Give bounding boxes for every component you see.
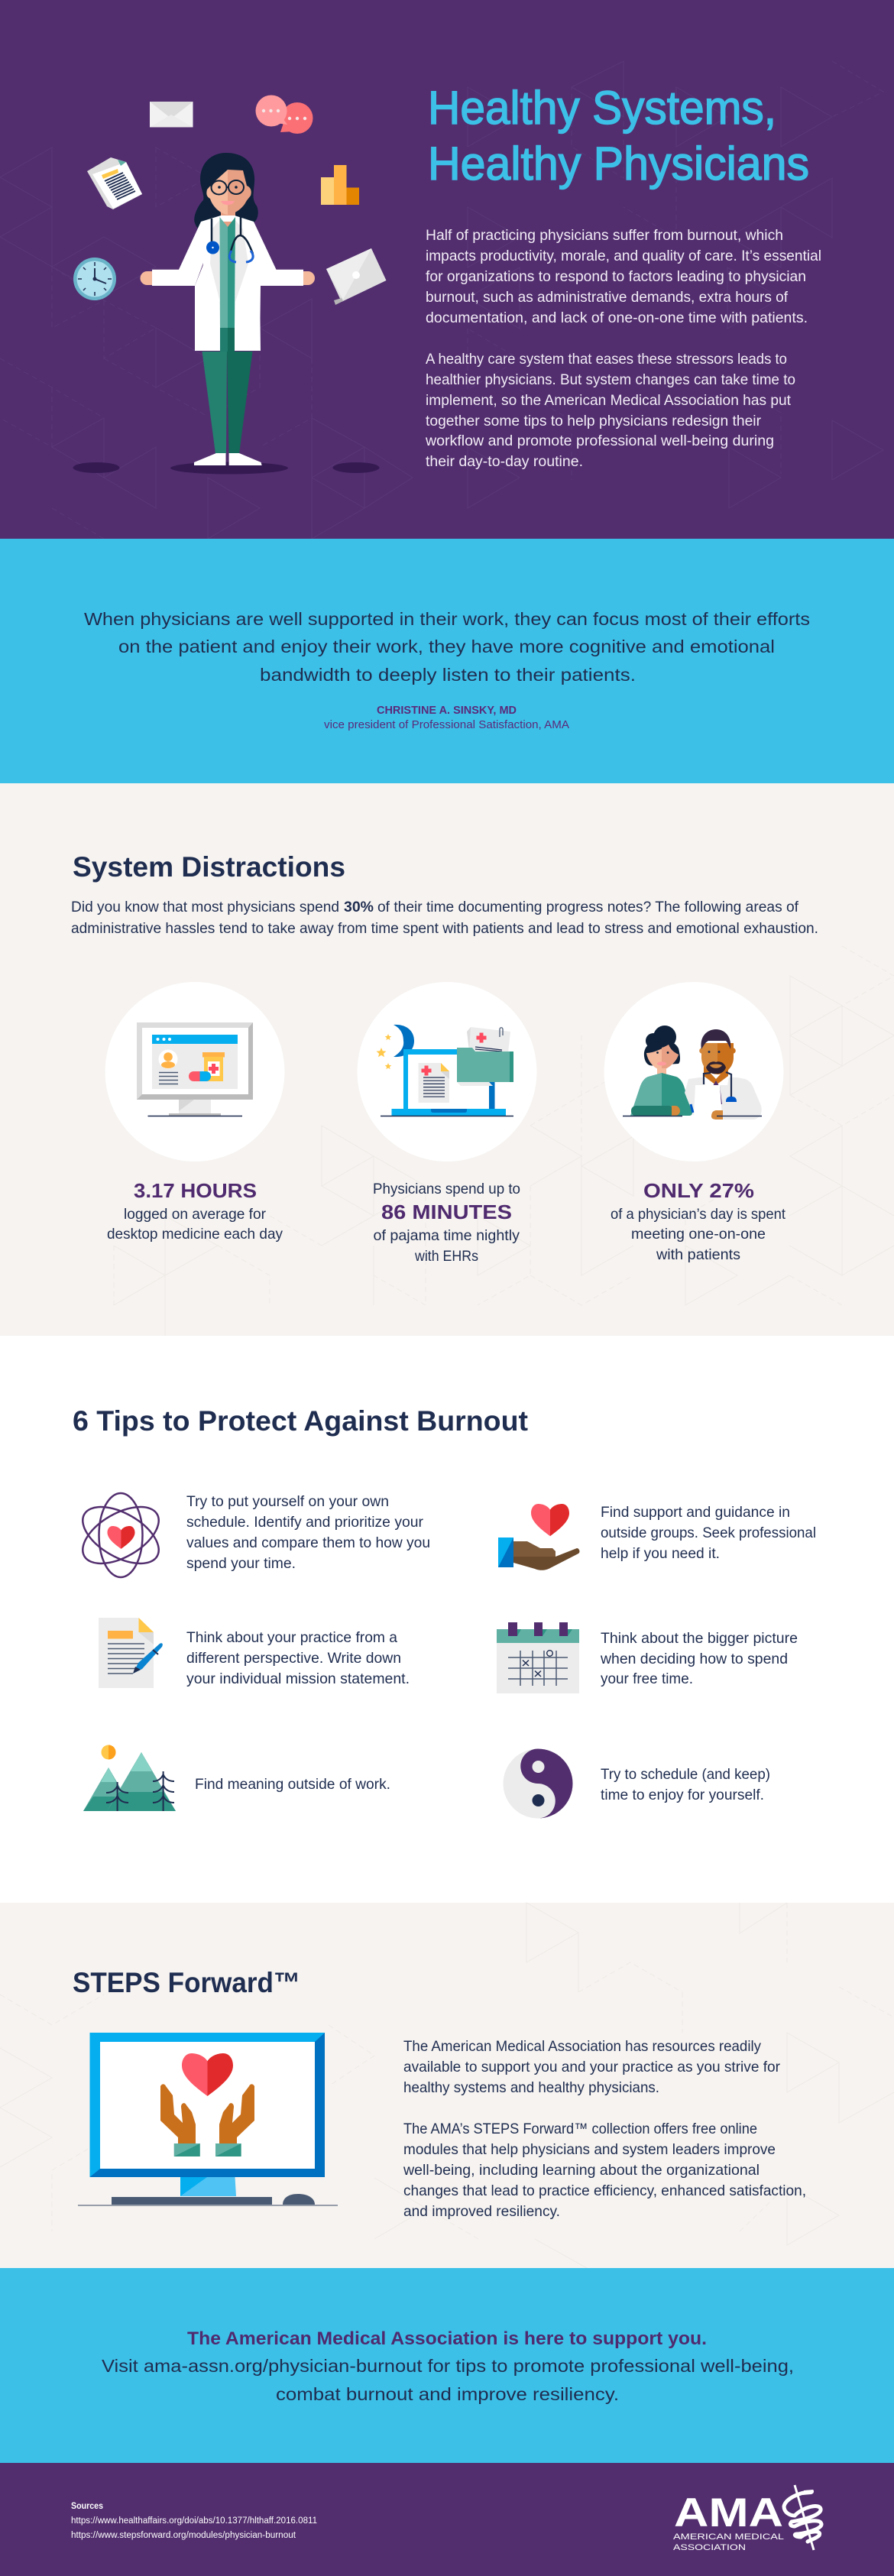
stethoscope	[212, 217, 253, 254]
body text: STEPS Forward collection	[403, 2121, 806, 2220]
icon: bar chart	[321, 165, 359, 205]
icon: hand with heart	[498, 1504, 579, 1570]
neck	[221, 208, 235, 228]
tip text: Find support and guidance in	[601, 1504, 790, 1521]
tip text: values and compare them to how you	[186, 1534, 430, 1551]
sources: https://www.healthaffairs.org/doi/abs/10.1377/hlthaff.2016.0811	[71, 2516, 317, 2526]
icon: stacked document	[87, 157, 142, 209]
body text: STEPS Forward collection: modules that help physicians and system leaders improve	[403, 2141, 776, 2158]
intro text: burnout: for organizations to respond to factors leading to physician	[426, 268, 806, 285]
tip text: spend your time.	[186, 1555, 296, 1572]
tip text: your free time.	[601, 1670, 693, 1687]
stat text: with patients	[656, 1246, 740, 1263]
call to action text: Visit ama-assn.org/physician-burnout for tips to promote professional well-being,	[102, 2356, 794, 2376]
intro text: healthy care system: A healthy care system that eases these stressors leads to	[426, 351, 787, 368]
heading: System Distractions: System Distractions	[73, 851, 345, 883]
stat text: with EHRs	[414, 1248, 478, 1265]
tip text: time to enjoy for yourself.	[601, 1787, 764, 1803]
glasses	[205, 180, 244, 194]
intro text: system distractions	[71, 899, 818, 937]
tip 5: bigger picture	[497, 1622, 798, 1693]
icon: desktop monitor	[137, 1022, 253, 1116]
intro text: system distractions: administrative hassles tend to take away from time spent with patients and lead to stress and emotional exhaustion.	[71, 921, 818, 937]
icon: mountains and trees	[83, 1745, 176, 1811]
tip text	[186, 1493, 430, 1572]
face	[206, 170, 228, 215]
body text: AMA resources	[403, 2038, 780, 2096]
section background: STEPS Forward	[0, 1903, 894, 2268]
call to action heading: The American Medical Association is here to support you.	[187, 2328, 707, 2349]
icon: calendar	[497, 1622, 579, 1693]
quote text: on the patient and enjoy their work, they have more cognitive and emotional	[118, 637, 775, 656]
intro text: system distractions: 30%	[344, 899, 374, 915]
hero illustration: doctor juggling tasks	[73, 95, 387, 474]
icon: laptop with folder at night	[376, 1025, 513, 1116]
tip text	[601, 1766, 770, 1803]
logo: American Medical Association: AMA	[674, 2490, 783, 2535]
stat text	[107, 1179, 283, 1243]
stat text: logged on average for	[124, 1206, 266, 1223]
tip 2: different perspective	[99, 1618, 410, 1688]
logo: American Medical Association: AMERICAN MEDICAL	[673, 2532, 784, 2542]
tip text: Think about the bigger picture	[601, 1630, 798, 1647]
quote text	[84, 609, 810, 685]
call to action text	[102, 2356, 794, 2404]
tip text	[600, 1630, 798, 1687]
sources	[71, 2502, 317, 2540]
title: Healthy Systems,	[428, 82, 776, 134]
lab coat	[152, 215, 303, 351]
intro text: healthy care system: healthier physicians. But system changes can take time to	[426, 371, 795, 388]
hands	[141, 271, 159, 285]
stat card: only 27%	[604, 982, 786, 1263]
tip 4: outside groups	[498, 1504, 816, 1570]
heading: STEPS Forward: STEPS Forward™	[73, 1967, 300, 1998]
scrub pants top	[220, 328, 228, 352]
icon: atom heart	[73, 1493, 168, 1577]
stat text: 3.17 HOURS	[134, 1179, 257, 1202]
patient	[630, 1026, 692, 1116]
icon: yin yang	[503, 1748, 573, 1819]
intro text: system distractions: of their time documenting progress notes? The following areas of	[377, 899, 799, 915]
tip 3: meaning outside of work	[83, 1745, 390, 1811]
panel: footer	[0, 2463, 894, 2576]
tip 6: time for yourself	[503, 1748, 770, 1819]
icon: patient and doctor	[623, 1026, 762, 1120]
stat card: 3.17 hours	[105, 982, 284, 1243]
intro text: healthy care system: workflow and promote professional well-being during	[425, 433, 774, 449]
legs	[202, 352, 227, 454]
body text: AMA resources: available to support you and your practice as you strive for	[403, 2059, 780, 2075]
tip text: different perspective. Write down	[186, 1650, 401, 1667]
floor shadows	[73, 462, 379, 474]
tip text: Find meaning outside of work.	[195, 1776, 390, 1793]
heading: 6 Tips: 6 Tips to Protect Against Burnout	[73, 1405, 528, 1437]
intro text: healthy care system: their day-to-day routine.	[426, 453, 583, 470]
stat text	[373, 1181, 520, 1265]
sources: https://www.stepsforward.org/modules/physician-burnout	[71, 2531, 296, 2540]
lapels	[210, 220, 220, 328]
doctor	[685, 1029, 762, 1120]
panel: quote	[0, 539, 894, 783]
sources: Sources	[71, 2502, 103, 2511]
scrub top	[220, 217, 228, 328]
tip text	[601, 1504, 816, 1562]
stat text: ONLY 27%	[643, 1179, 754, 1202]
tip text: schedule. Identify and prioritize your	[186, 1514, 424, 1531]
quote text: When physicians are well supported in their work, they can focus most of their efforts	[84, 609, 810, 629]
section background: system distractions	[0, 783, 894, 1336]
intro text: burnout: Half of practicing physicians suffer from burnout, which	[426, 227, 783, 244]
tip text: help if you need it.	[601, 1545, 720, 1562]
quote attribution: CHRISTINE A. SINSKY, MD	[377, 705, 517, 717]
icon: envelope	[150, 102, 193, 127]
quote text: bandwidth to deeply listen to their patients.	[260, 665, 636, 685]
tip text: outside groups. Seek professional	[601, 1525, 816, 1541]
panel: call to action	[0, 2268, 894, 2463]
stat card: 86 minutes	[358, 982, 536, 1265]
logo: staff and snake	[784, 2485, 821, 2550]
stat text: of pajama time nightly	[373, 1227, 520, 1244]
intro text: burnout: impacts productivity, morale, and quality of care. It’s essential	[426, 248, 821, 264]
stat text: of a physician’s day is spent	[611, 1206, 786, 1223]
stat text: meeting one-on-one	[631, 1226, 766, 1243]
intro text: healthy care system: together some tips to help physicians redesign their	[426, 413, 761, 429]
icon: laptop	[326, 248, 387, 305]
body text: STEPS Forward collection: and improved resiliency.	[403, 2203, 560, 2220]
intro text: burnout: burnout, such as administrative demands, extra hours of	[426, 289, 789, 306]
quote attribution	[324, 705, 569, 731]
stat text: Physicians spend up to	[373, 1181, 520, 1197]
body text: AMA resources: The American Medical Association has resources readily	[403, 2038, 761, 2055]
body text: STEPS Forward collection: The AMA’s STEPS Forward™ collection offers free online	[403, 2121, 757, 2137]
tip 1: own schedule	[73, 1493, 430, 1577]
intro text: healthy care system	[425, 351, 795, 470]
stat text: 86 MINUTES	[381, 1201, 512, 1223]
icon: document with pen	[99, 1618, 163, 1688]
section background: purple hero	[0, 0, 894, 539]
intro text: burnout: documentation, and lack of one-on-one time with patients.	[426, 309, 808, 326]
tip text: Try to schedule (and keep)	[601, 1766, 770, 1783]
body text: STEPS Forward collection: changes that lead to practice efficiency, enhanced satisfaction,	[403, 2182, 806, 2199]
stat text	[611, 1179, 786, 1263]
shoes	[194, 453, 262, 465]
tip text: Think about your practice from a	[186, 1629, 397, 1646]
tip text: your individual mission statement.	[186, 1670, 410, 1687]
stat text: desktop medicine each day	[107, 1226, 283, 1243]
figure: doctor	[141, 153, 315, 465]
icon: wall clock	[73, 258, 116, 300]
tip text	[186, 1629, 410, 1687]
illustration: monitor with heart and hands	[78, 2033, 338, 2205]
title: Healthy Physicians	[428, 138, 809, 190]
intro text: healthy care system: implement, so the American Medical Association has put	[426, 392, 792, 409]
intro text: system distractions: Did you know that most physicians spend	[71, 899, 339, 915]
intro text: burnout	[426, 227, 821, 326]
call to action text: combat burnout and improve resiliency.	[276, 2384, 619, 2404]
icon: speech bubbles	[255, 95, 313, 134]
tip text: Try to put yourself on your own	[186, 1493, 389, 1510]
logo: American Medical Association: ASSOCIATION	[673, 2543, 746, 2552]
quote attribution: vice president of Professional Satisfaction, AMA	[324, 719, 569, 731]
hair	[194, 153, 258, 230]
title	[428, 82, 809, 190]
logo: American Medical Association	[673, 2485, 821, 2552]
body text: STEPS Forward collection: well-being, including learning about the organizational	[403, 2162, 760, 2179]
tip text: when deciding how to spend	[600, 1651, 788, 1667]
body text: AMA resources: healthy systems and healthy physicians.	[403, 2079, 659, 2096]
